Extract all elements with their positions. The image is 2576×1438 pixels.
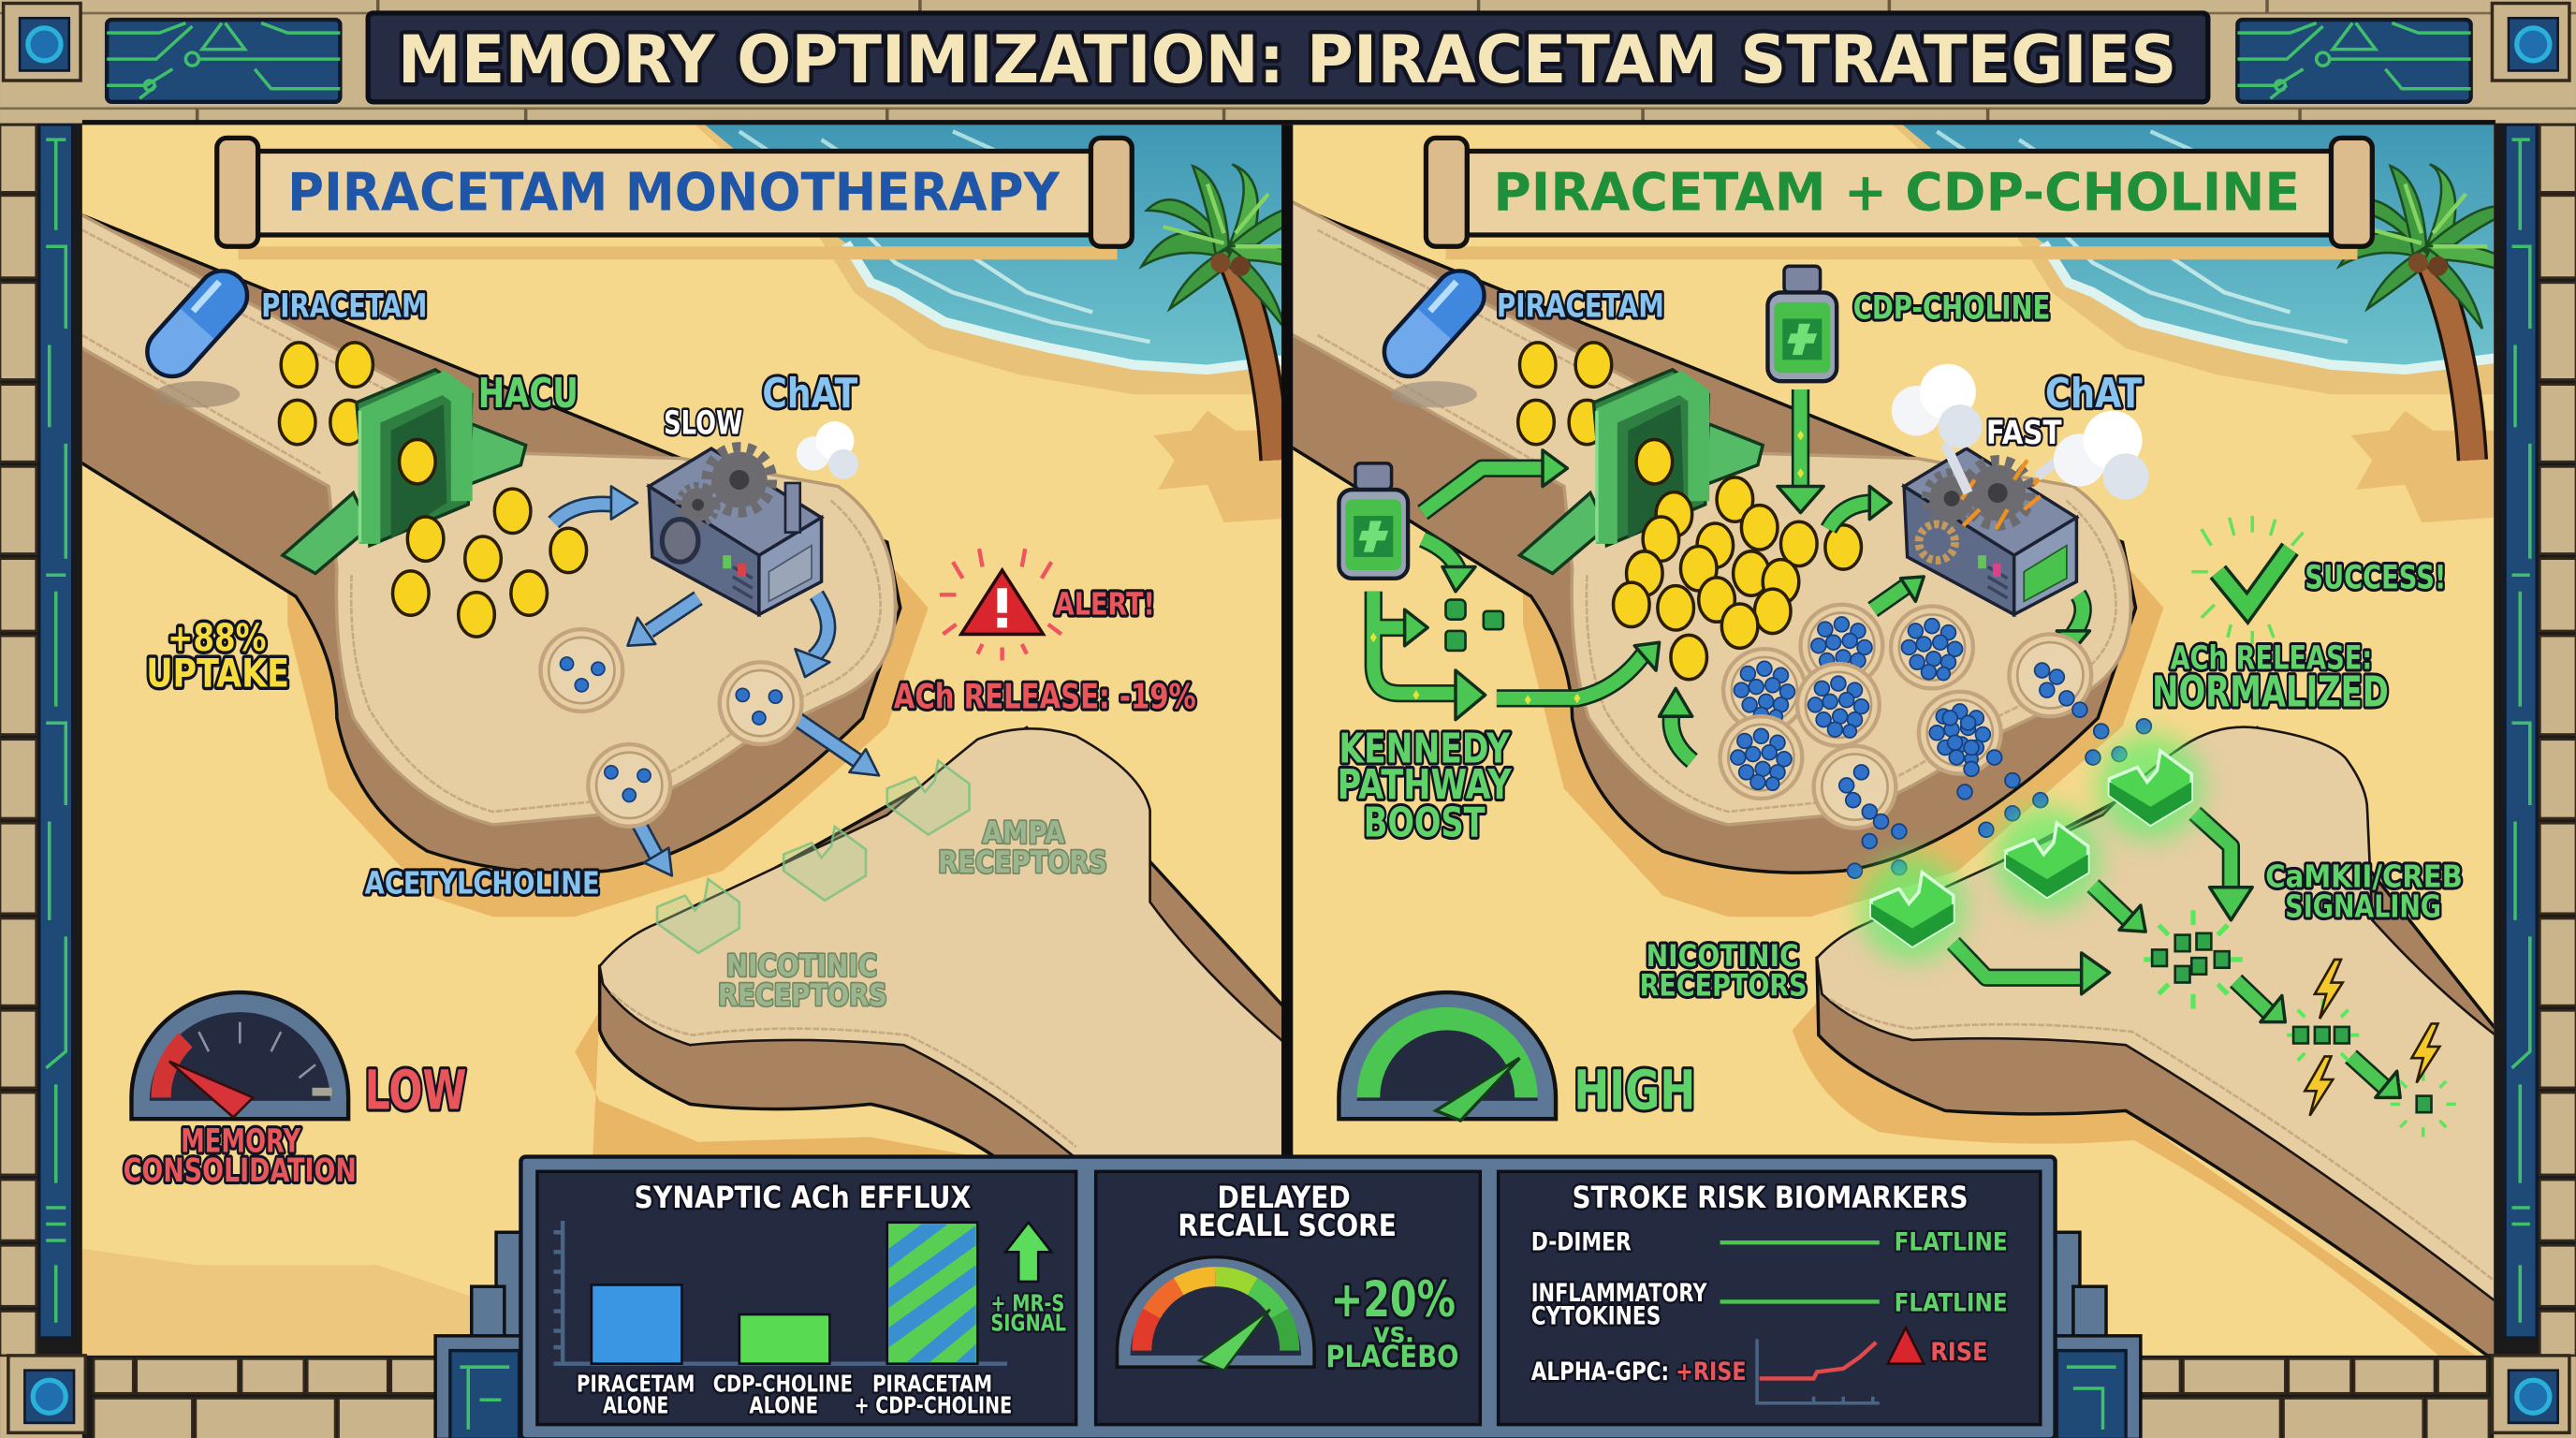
- row: d-dimer: FLATLINE: [1895, 1229, 2008, 1257]
- tech side blocks: [435, 1232, 2141, 1438]
- coins before transporter: [279, 343, 373, 445]
- signaling squares: [2152, 933, 2431, 1112]
- icon: up arrow: [1005, 1223, 1051, 1282]
- label: ACh release normalized: ACh RELEASE:: [2170, 638, 2372, 677]
- panel: delayed recall score: [1096, 1171, 1480, 1425]
- label: ACh release -19%: ACh RELEASE: -19%: [894, 676, 1196, 716]
- row: inflammatory cytokines: FLATLINE: [1895, 1290, 2008, 1318]
- title: MEMORY OPTIMIZATION: PIRACETAM STRATEGIES: [398, 22, 2176, 98]
- icon: top-right corner tile: [2492, 4, 2569, 81]
- label: nicotinic receptors faded: RECEPTORS: [718, 979, 887, 1013]
- label: memory consolidation: CONSOLIDATION: [124, 1152, 357, 1190]
- heading: delayed recall score: DELAYED: [1218, 1181, 1351, 1215]
- scroll banner: combination: [1426, 138, 2372, 259]
- label: ChAT: ChAT: [762, 370, 857, 418]
- panel: piracetam plus cdp-choline: [1236, 124, 2528, 1364]
- label: nicotinic receptors faded: NICOTINIC: [726, 949, 877, 983]
- icon: bottom-left corner tile: [8, 1356, 85, 1432]
- label: +MR-S signal: [990, 1290, 1066, 1337]
- label: nicotinic receptors: NICOTINIC: [1647, 940, 1799, 974]
- icon: piracetam pill left: [137, 261, 257, 407]
- icon: ChAT machine slow: [649, 421, 858, 614]
- heading: delayed recall score: [1178, 1181, 1397, 1243]
- bar labels: + CDP-CHOLINE: [855, 1391, 1012, 1418]
- gauge: memory low: [131, 992, 348, 1119]
- coins before transporter right: [1518, 343, 1612, 445]
- label: slow: SLOW: [664, 404, 742, 442]
- panel: stroke risk biomarkers: [1499, 1171, 2041, 1425]
- row: alpha-gpc rise: [1531, 1328, 1988, 1403]
- arrows: blue flow: [554, 486, 879, 875]
- heading: piracetam monotherapy: PIRACETAM MONOTHERAPY: [287, 163, 1061, 224]
- icon: HACU transporter: [283, 370, 526, 574]
- label: low: LOW: [365, 1059, 466, 1123]
- stat: +20% vs placebo: +20%: [1331, 1271, 1456, 1328]
- icon: piracetam pill right: [1374, 261, 1494, 407]
- stat: +20% vs placebo: [1325, 1271, 1459, 1374]
- data console: [520, 1157, 2056, 1438]
- bar labels: ALONE: [603, 1391, 668, 1418]
- label: ACh release normalized: NORMALIZED: [2152, 668, 2389, 717]
- presynaptic neuron: [1236, 172, 2163, 917]
- line chart: rise: [1757, 1339, 1880, 1403]
- row: d-dimer: [1531, 1229, 2008, 1257]
- released acetylcholine dots: [1839, 663, 2151, 878]
- heading: delayed recall score: RECALL SCORE: [1178, 1210, 1397, 1243]
- icon: ChAT machine fast: [1892, 364, 2149, 614]
- coin in gate: [400, 439, 435, 484]
- label: acetylcholine: ACETYLCHOLINE: [365, 865, 600, 902]
- gauge: recall: [1117, 1257, 1314, 1371]
- coins pile inside terminal: [1613, 477, 1862, 680]
- circuit plate right: [2237, 20, 2471, 102]
- label: rise: RISE: [1930, 1339, 1988, 1367]
- label: CaMKII/CREB signaling: SIGNALING: [2285, 888, 2441, 924]
- label: CaMKII/CREB signaling: [2265, 858, 2463, 924]
- panel: synaptic ACh efflux: [537, 1171, 1076, 1425]
- label: piracetam: PIRACETAM: [1497, 287, 1664, 326]
- signaling sparkles: [2144, 910, 2456, 1137]
- icon: bottom-right corner tile: [2492, 1356, 2569, 1432]
- row: inflammatory cytokines: CYTOKINES: [1531, 1303, 1661, 1331]
- label: HACU: HACU: [478, 370, 578, 418]
- heading: stroke risk biomarkers: STROKE RISK BIOMARKERS: [1573, 1181, 1969, 1215]
- row: alpha-gpc rise: +RISE: [1676, 1358, 1747, 1387]
- label: memory consolidation: MEMORY: [181, 1122, 301, 1160]
- callout: +88% uptake: +88%: [168, 616, 266, 660]
- row: inflammatory cytokines: INFLAMMATORY: [1531, 1280, 1707, 1308]
- bar chart: [554, 1221, 1007, 1364]
- label: nicotinic receptors: RECEPTORS: [1640, 970, 1808, 1004]
- label: AMPA receptors: RECEPTORS: [938, 846, 1107, 880]
- row: alpha-gpc rise: ALPHA-GPC:: [1531, 1358, 1669, 1387]
- icon: HACU transporter right: [1519, 370, 1763, 574]
- callout: +88% uptake: UPTAKE: [146, 651, 289, 697]
- kennedy precursor squares: [1445, 600, 1503, 651]
- arrows: green flow: [1370, 389, 2400, 1097]
- vesicles: full acetylcholine: [1720, 605, 2091, 829]
- frame: right stone column: [2494, 124, 2576, 1356]
- coins inside terminal: [393, 489, 587, 637]
- label: kennedy pathway boost: [1338, 725, 1513, 846]
- icon: CDP-choline bottle top: [1767, 266, 1837, 381]
- stat: +20% vs placebo: PLACEBO: [1325, 1341, 1459, 1374]
- label: +MR-S signal: SIGNAL: [990, 1310, 1066, 1337]
- title plate: [368, 13, 2208, 102]
- label: fast: FAST: [1986, 414, 2062, 452]
- scroll banner: monotherapy: [217, 138, 1132, 259]
- label: kennedy pathway boost: PATHWAY: [1338, 761, 1513, 809]
- label: kennedy pathway boost: BOOST: [1364, 799, 1486, 846]
- row: d-dimer: D-DIMER: [1531, 1229, 1632, 1257]
- label: nicotinic receptors faded: [718, 949, 887, 1013]
- frame: left stone column: [0, 124, 82, 1356]
- label: nicotinic receptors: [1640, 940, 1808, 1004]
- postsynaptic neuron: [1793, 1003, 2487, 1364]
- bar labels: PIRACETAM: [872, 1371, 992, 1398]
- icon: success check: [2191, 516, 2304, 644]
- bar labels: CDP-CHOLINE: [713, 1371, 853, 1398]
- frame: bottom stone wall right: [2136, 1356, 2494, 1438]
- icon: alert triangle: [940, 549, 1061, 661]
- label: piracetam: PIRACETAM: [261, 287, 427, 326]
- label: ChAT: ChAT: [2045, 370, 2143, 418]
- callout: +88% uptake: [146, 616, 289, 697]
- coin in gate right: [1636, 439, 1673, 484]
- frame: top stone band: [0, 0, 2576, 125]
- label: memory consolidation: [124, 1122, 357, 1190]
- gauge: memory high: [1339, 992, 1556, 1121]
- label: alert: ALERT!: [1055, 585, 1155, 622]
- label: AMPA receptors: [938, 816, 1107, 880]
- label: +MR-S signal: + MR-S: [990, 1290, 1064, 1317]
- panel divider: [1281, 124, 1293, 1175]
- icon: CDP-choline bottle left: [1339, 463, 1408, 579]
- icon: warning triangle: [1888, 1328, 1924, 1364]
- icon: lightning bolts: [2305, 960, 2439, 1116]
- label: CaMKII/CREB signaling: CaMKII/CREB: [2265, 858, 2463, 895]
- ghost receptors: [657, 761, 970, 953]
- label: ACh release normalized: [2152, 638, 2389, 717]
- glowing receptors: [1860, 734, 2203, 961]
- stat: +20% vs placebo: vs.: [1373, 1317, 1414, 1350]
- circuit plate left: [107, 20, 340, 102]
- bar labels: [577, 1371, 1012, 1418]
- bar labels: PIRACETAM: [577, 1371, 695, 1398]
- frame: bottom stone wall left: [82, 1356, 437, 1438]
- icon: top-left corner tile: [4, 4, 80, 81]
- postsynaptic neuron: [575, 1013, 966, 1155]
- heading: synaptic ACh efflux: SYNAPTIC ACh EFFLUX: [634, 1181, 971, 1215]
- vesicles: low acetylcholine: [540, 629, 802, 827]
- label: success: SUCCESS!: [2305, 558, 2446, 596]
- panel: piracetam monotherapy: [0, 124, 1331, 1356]
- label: CDP-choline: CDP-CHOLINE: [1853, 288, 2050, 327]
- heading: piracetam + cdp-choline: PIRACETAM + CDP-CHOLINE: [1493, 163, 2300, 224]
- bar labels: ALONE: [749, 1391, 818, 1418]
- row: inflammatory cytokines: [1531, 1280, 2008, 1331]
- presynaptic neuron: [82, 213, 929, 917]
- label: kennedy pathway boost: KENNEDY: [1339, 725, 1511, 772]
- label: AMPA receptors: AMPA: [983, 816, 1065, 850]
- label: high: HIGH: [1573, 1059, 1695, 1123]
